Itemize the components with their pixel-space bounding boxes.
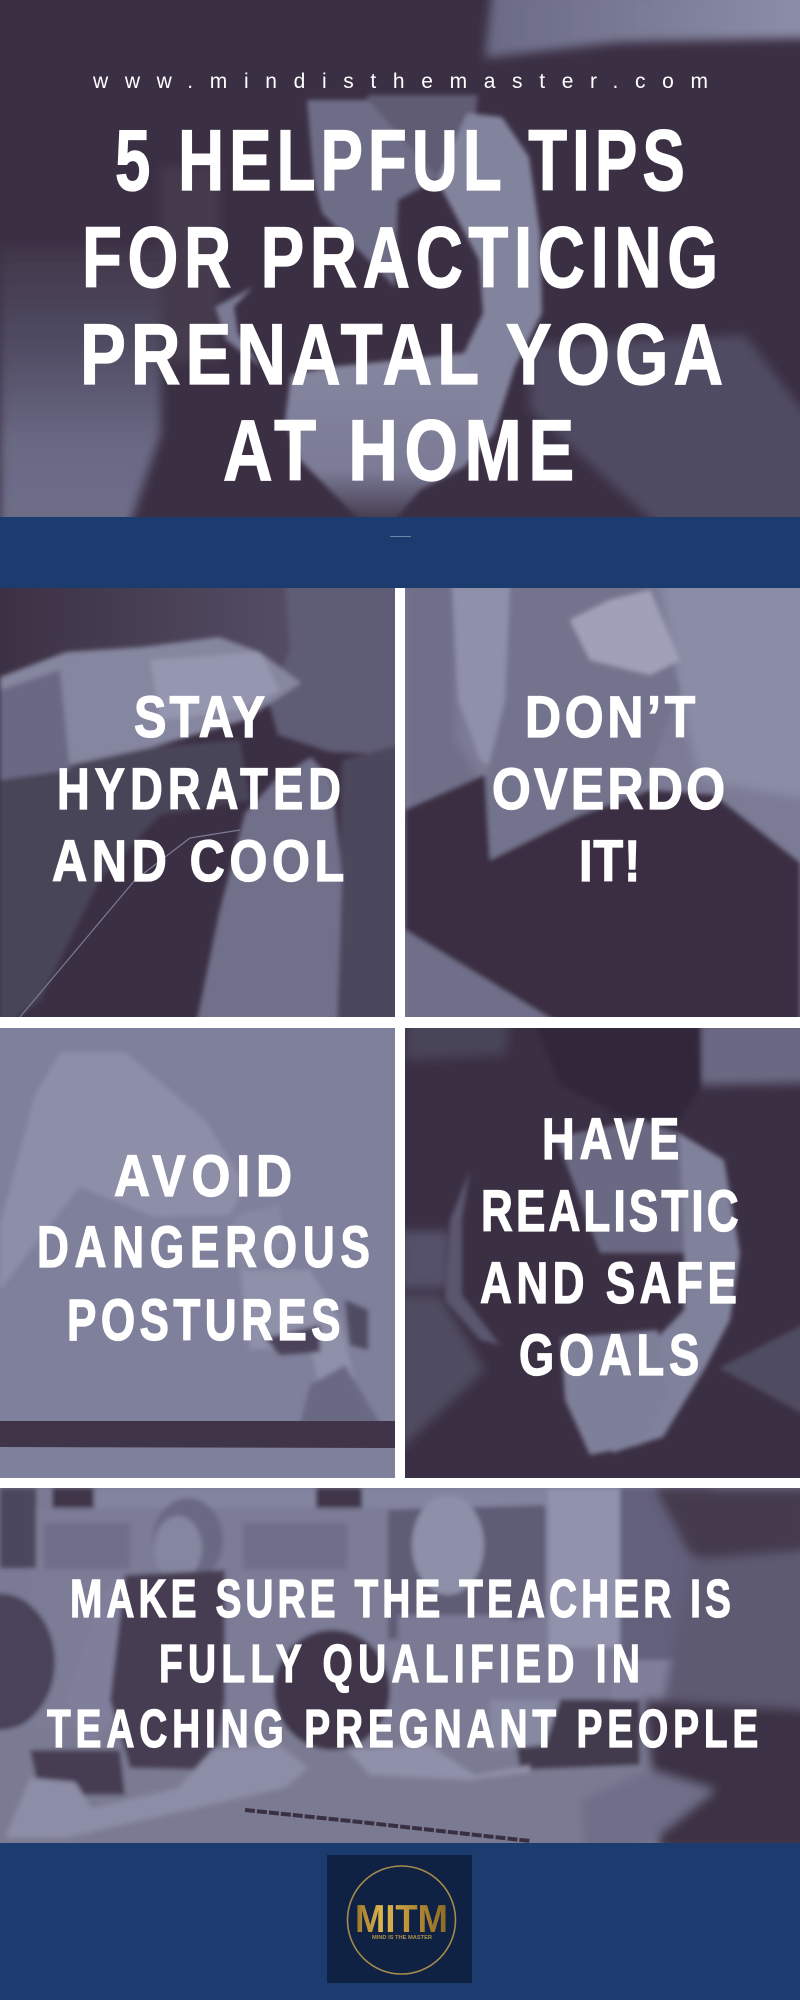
tip heading: POSTURES <box>67 1287 341 1352</box>
title: 5 HELPFUL TIPS <box>115 114 685 209</box>
tip heading: DANGEROUS <box>37 1214 370 1279</box>
blue divider band <box>0 517 800 588</box>
tip heading: OVERDO <box>492 758 725 822</box>
panel: stay hydrated and cool <box>0 588 395 1017</box>
panel: avoid dangerous postures <box>0 1028 395 1478</box>
tip heading: STAY <box>134 686 265 750</box>
photo: woman holding belly close-up <box>400 1020 800 1478</box>
photo: pregnant torso on mat <box>405 580 800 1025</box>
tip heading: REALISTIC <box>481 1178 739 1243</box>
tip heading <box>52 686 344 894</box>
tip heading: MAKE SURE THE TEACHER IS <box>70 1568 731 1628</box>
tip heading <box>480 1108 739 1388</box>
photo: woman holding belly <box>0 0 800 530</box>
tip heading: IT! <box>579 830 640 894</box>
tip heading <box>47 1568 758 1758</box>
logo: MITM: MIND IS THE MASTER <box>372 1935 432 1941</box>
title: PRENATAL YOGA <box>80 307 723 403</box>
website url: www.mindisthemaster.com <box>92 70 708 93</box>
tip heading <box>37 1145 370 1352</box>
tip heading: HAVE <box>542 1108 679 1172</box>
title <box>80 114 723 499</box>
panel: don't overdo it <box>405 588 800 1017</box>
tip heading: TEACHING PREGNANT PEOPLE <box>47 1698 758 1758</box>
tip heading: AND SAFE <box>480 1250 737 1315</box>
panel: have realistic and safe goals <box>405 1028 800 1478</box>
logo: MITM: MITM <box>355 1898 448 1941</box>
tip heading: AND COOL <box>52 830 344 894</box>
tip heading: DON’T <box>525 686 695 750</box>
title: AT HOME <box>223 403 574 499</box>
title: FOR PRACTICING <box>82 210 718 306</box>
tip heading: GOALS <box>519 1324 699 1388</box>
tip heading: HYDRATED <box>57 758 341 822</box>
tip heading: AVOID <box>114 1145 292 1209</box>
logo: MITM <box>327 1855 472 1983</box>
panel: teacher qualification <box>0 1488 800 1843</box>
tip heading <box>492 686 725 894</box>
tip heading: FULLY QUALIFIED IN <box>159 1633 640 1693</box>
photo: downward dog pose <box>0 1028 395 1478</box>
photo: woman drinking from bottle <box>0 580 400 1030</box>
footer band with logo <box>0 1843 800 2000</box>
panel: hero with title <box>0 0 800 517</box>
photo: group prenatal class <box>0 1488 800 1850</box>
